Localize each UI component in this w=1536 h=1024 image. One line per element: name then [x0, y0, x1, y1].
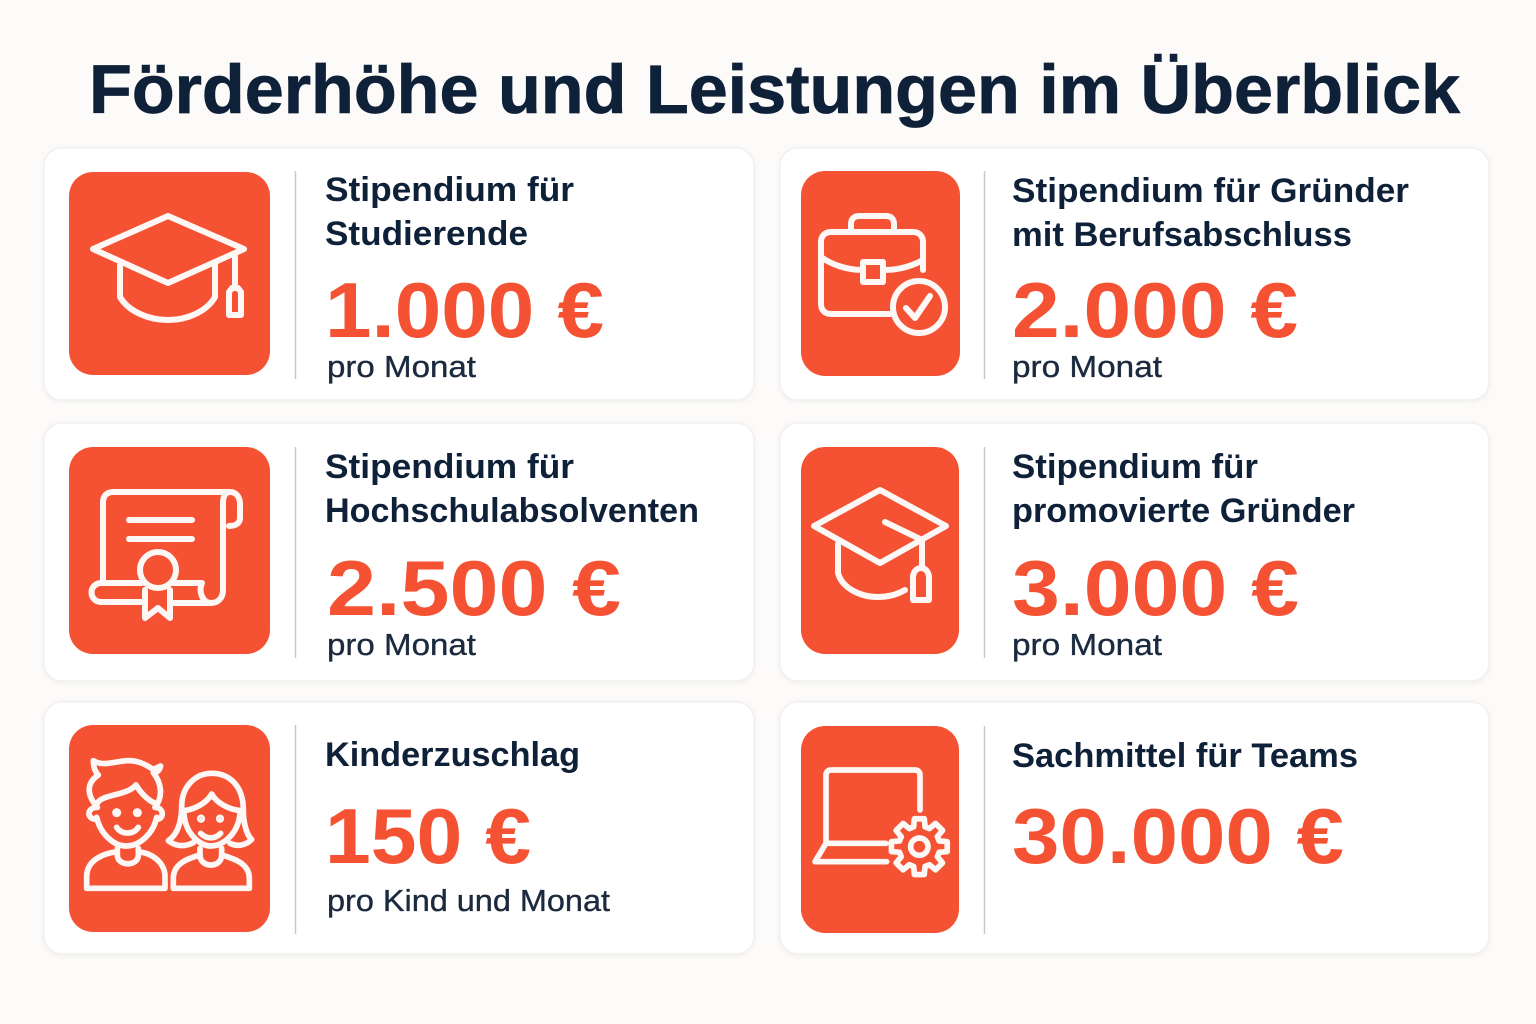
icon: briefcase with check — [821, 216, 945, 333]
icon: diploma scroll — [92, 492, 240, 618]
panel: Kinderzuschlag — [44, 702, 754, 954]
heading: Kinderzuschlag — [325, 736, 580, 774]
amount: 1.000 € — [325, 266, 604, 354]
icon: two children — [87, 761, 252, 888]
amount: 2.000 € — [1012, 266, 1298, 354]
heading: Stipendium für — [325, 448, 574, 486]
amount: 150 € — [325, 792, 531, 880]
panel: Stipendium für Studierende — [44, 148, 754, 400]
heading: Stipendium für Gründer — [1012, 172, 1409, 210]
unit: pro Monat — [327, 349, 476, 384]
unit: pro Monat — [327, 627, 476, 662]
panel: Stipendium für Gründer mit Berufsabschluss — [780, 148, 1489, 400]
amount: 30.000 € — [1012, 792, 1344, 880]
unit: pro Monat — [1012, 349, 1162, 384]
panel: Stipendium für promovierte Gründer — [780, 423, 1489, 681]
unit: pro Kind und Monat — [327, 883, 610, 918]
heading: Sachmittel für Teams — [1012, 737, 1358, 775]
panel: Stipendium für promovierte Gründer: promovierte Gründer — [1012, 492, 1355, 530]
heading: Stipendium für — [1012, 448, 1258, 486]
amount: 2.500 € — [327, 544, 621, 632]
panel: Stipendium für Gründer mit Berufsabschluss: mit Berufsabschluss — [1012, 216, 1352, 254]
icon: graduation cap — [93, 216, 244, 320]
panel: Stipendium für Studierende: Studierende — [325, 215, 528, 253]
panel: Stipendium für Hochschulabsolventen: Hochschulabsolventen — [325, 492, 699, 530]
icon: graduation cap with band — [814, 490, 946, 600]
amount: 3.000 € — [1012, 544, 1299, 632]
panel: Stipendium für Hochschulabsolventen — [44, 423, 754, 681]
unit: pro Monat — [1012, 627, 1162, 662]
title: Förderhöhe und Leistungen im Überblick — [89, 51, 1461, 128]
panel: Sachmittel für Teams — [780, 702, 1489, 954]
heading: Stipendium für — [325, 171, 574, 209]
icon: laptop with gear — [815, 770, 947, 875]
